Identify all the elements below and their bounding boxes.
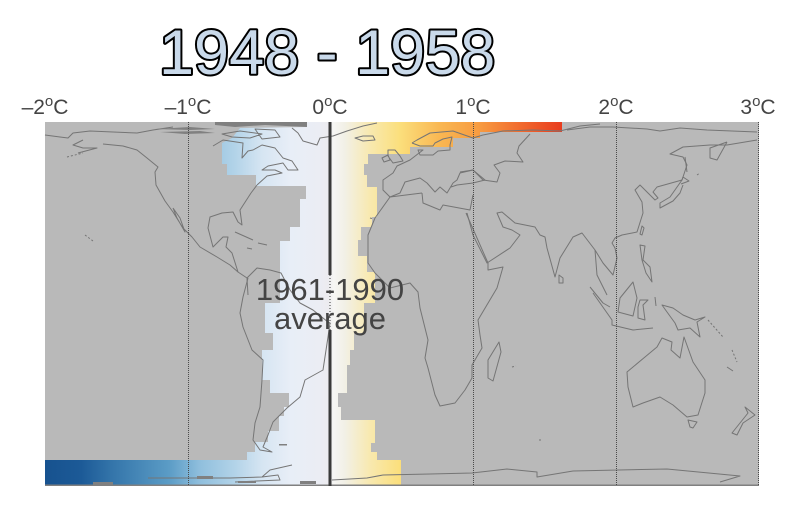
axis labels: temperature scale [22, 93, 776, 119]
axis labels: temperature scale: C [332, 96, 348, 119]
polar ice masses and bottom edge [45, 122, 759, 486]
baseline label [256, 272, 404, 336]
axis labels: temperature scale: o [324, 93, 332, 110]
dotted temperature gridlines [188, 122, 758, 486]
axis labels: temperature scale: –1 [165, 96, 188, 119]
coastlines [45, 123, 757, 482]
axis labels: temperature scale: o [752, 93, 760, 110]
axis labels: temperature scale: 0 [312, 96, 324, 119]
axis labels: temperature scale: C [760, 96, 776, 119]
ocean temperature anomaly shading [45, 122, 562, 485]
axis labels: temperature scale: C [196, 96, 211, 119]
axis labels: temperature scale: o [45, 93, 53, 110]
axis labels: temperature scale: –2 [22, 96, 45, 119]
map panel [45, 122, 759, 486]
baseline label: 1961-1990 [256, 272, 404, 307]
zero line: 1961-1990 baseline [328, 122, 332, 486]
axis labels: temperature scale: C [53, 96, 68, 119]
axis labels: temperature scale: C [618, 96, 634, 119]
axis labels: temperature scale: o [610, 93, 618, 110]
title: 1948 - 1958 [159, 18, 495, 88]
axis labels: temperature scale: 1 [455, 96, 467, 119]
baseline label: average [274, 301, 386, 336]
axis labels: temperature scale: C [475, 96, 491, 119]
axis labels: temperature scale: 2 [598, 96, 610, 119]
axis labels: temperature scale: o [188, 93, 196, 110]
land and no-data background [45, 122, 759, 486]
axis labels: temperature scale: o [467, 93, 475, 110]
axis labels: temperature scale: 3 [740, 96, 752, 119]
